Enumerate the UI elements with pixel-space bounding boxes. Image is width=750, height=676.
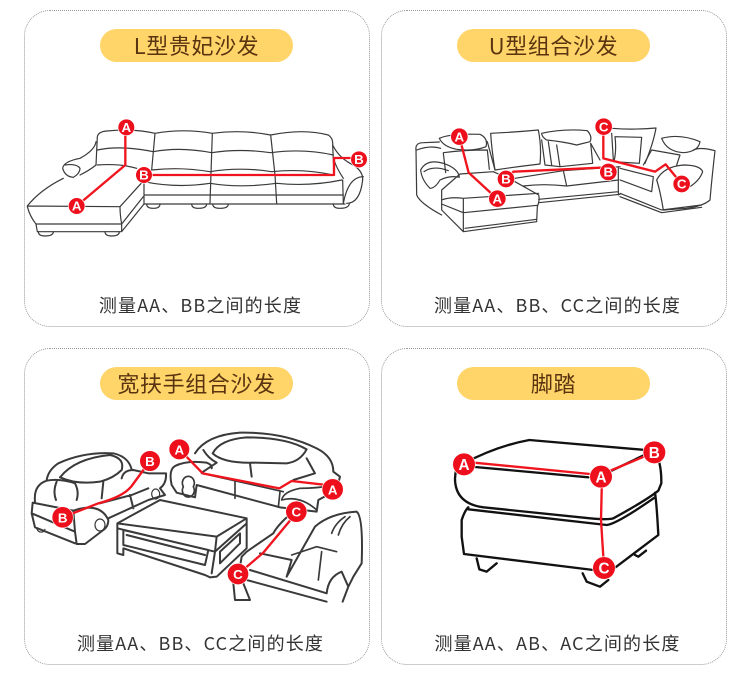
- illustration: U sofa with measurements: A: [455, 129, 465, 144]
- caption: footstool: 测量AA、AB、AC之间的长度: [434, 630, 680, 656]
- illustration: L sofa with measurements: B: [354, 152, 364, 167]
- illustration: U sofa with measurements: B: [501, 172, 511, 187]
- illustration: wide armrest sofa set with measurements: A: [328, 482, 338, 497]
- illustration: footstool with measurements: B: [649, 445, 660, 462]
- illustration: L sofa with measurements: A: [122, 120, 132, 135]
- heading: U sofa: U型组合沙发: [489, 29, 618, 61]
- illustration: U sofa with measurements: C: [677, 177, 687, 192]
- illustration: wide armrest sofa set with measurements: C: [233, 567, 243, 582]
- illustration: footstool with measurements: C: [598, 561, 610, 578]
- panel: L-shaped sofa: [24, 10, 370, 327]
- illustration: wide armrest sofa set with measurements: C: [292, 505, 302, 520]
- illustration: L sofa with measurements: B: [139, 168, 149, 183]
- illustration: U sofa with measurements: C: [599, 119, 609, 134]
- illustration: L sofa with measurements: A: [72, 199, 82, 214]
- caption: L sofa: 测量AA、BB之间的长度: [99, 292, 302, 318]
- illustration: U sofa with measurements: B: [604, 165, 614, 180]
- heading: L sofa: L型贵妃沙发: [134, 29, 259, 61]
- caption: U sofa: 测量AA、BB、CC之间的长度: [434, 292, 681, 318]
- panel: U-shaped sofa: [381, 10, 727, 327]
- heading: U sofa: [457, 29, 650, 62]
- heading: wide armrest sofa: 宽扶手组合沙发: [117, 367, 276, 399]
- illustration: wide armrest sofa set with measurements: B: [145, 454, 155, 469]
- heading: footstool: 脚踏: [531, 367, 576, 399]
- illustration: footstool with measurements: [453, 440, 666, 587]
- caption: wide armrest sofa: 测量AA、BB、CC之间的长度: [77, 630, 324, 656]
- heading: L sofa: [100, 29, 293, 62]
- panel: wide armrest sofa: [24, 348, 370, 665]
- illustration: wide armrest sofa set with measurements: A: [175, 442, 185, 457]
- illustration: U sofa with measurements: [416, 118, 715, 232]
- illustration: wide armrest sofa set with measurements: B: [58, 510, 68, 525]
- illustration: footstool with measurements: A: [458, 457, 470, 474]
- illustration: L sofa with measurements: [27, 119, 367, 236]
- illustration: footstool with measurements: A: [595, 469, 607, 486]
- illustration: wide armrest sofa set with measurements: [32, 433, 362, 602]
- illustration: U sofa with measurements: A: [493, 191, 503, 206]
- panel: footstool: [381, 348, 727, 665]
- heading: footstool: [457, 367, 650, 400]
